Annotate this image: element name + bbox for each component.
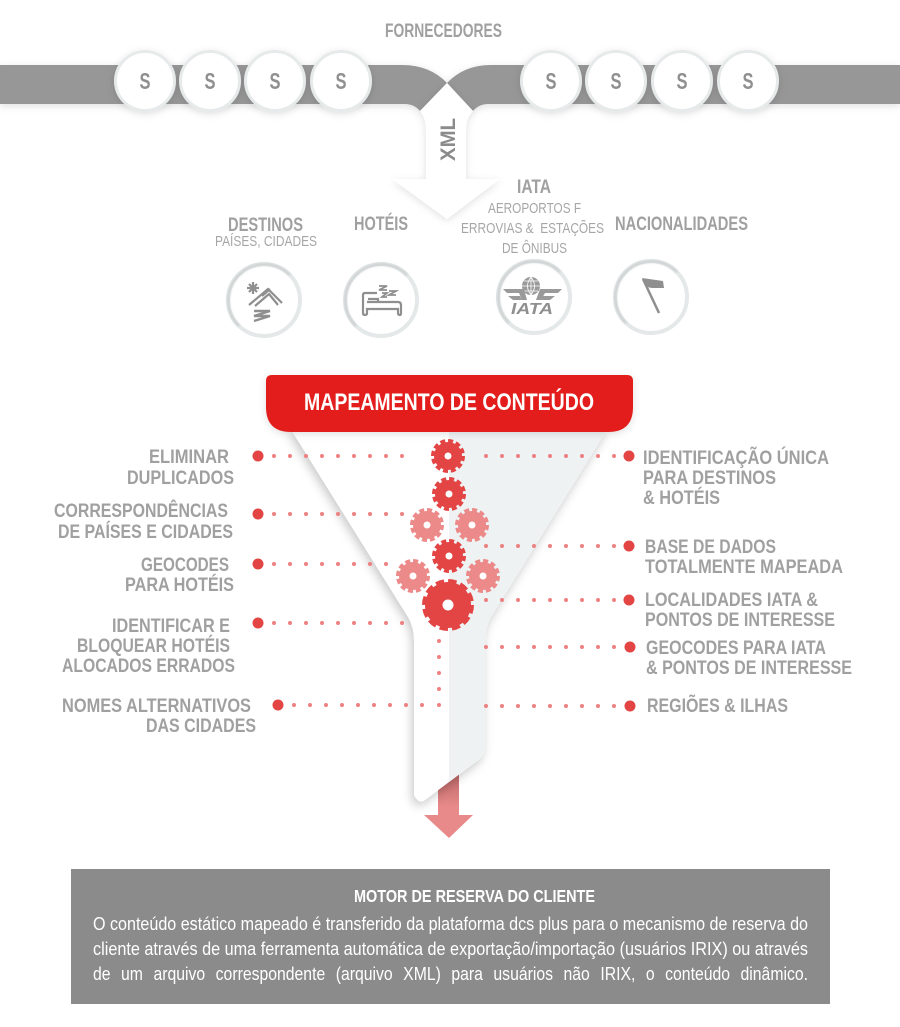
panel body text: de um arquivo correspondente (arquivo XML) para usuários não IRIX, o conteúdo dinâmico.	[93, 964, 808, 984]
category: hoteis: HOTÉIS	[354, 213, 408, 235]
right labels: TOTALMENTE MAPEADA	[645, 557, 843, 578]
category: destinos: DESTINOS	[228, 215, 303, 236]
supplier circles: S	[270, 68, 280, 94]
left labels: GEOCODES	[141, 555, 229, 576]
left labels: ELIMINAR	[149, 447, 229, 468]
category: hoteis	[345, 213, 417, 336]
supplier circles: S	[676, 68, 688, 94]
left labels: PARA HOTÉIS	[125, 574, 234, 596]
right labels: IDENTIFICAÇÃO ÚNICA	[643, 447, 829, 469]
left labels: NOMES ALTERNATIVOS	[62, 696, 251, 717]
left labels: CORRESPONDÊNCIAS	[54, 500, 228, 522]
panel body text: O conteúdo estático mapeado é transferido da plataforma dcs plus para o mecanismo de reserva do	[93, 914, 808, 934]
category: destinos	[215, 215, 317, 336]
left labels: IDENTIFICAR E	[112, 616, 230, 637]
arrow: XML	[392, 83, 500, 219]
supplier circles: S	[546, 68, 556, 94]
panel body text: cliente através de uma ferramenta automática de exportação/importação (usuários IRIX) ou através	[93, 939, 808, 959]
right labels: & PONTOS DE INTERESSE	[646, 658, 852, 679]
left labels: DUPLICADOS	[127, 468, 234, 489]
category: nacionalidades	[615, 214, 748, 333]
right labels: PARA DESTINOS	[643, 468, 776, 489]
icon: flag	[642, 278, 664, 313]
supplier circles: S	[742, 68, 754, 94]
left labels: DAS CIDADES	[146, 716, 256, 737]
left labels: ALOCADOS ERRADOS	[62, 656, 235, 677]
icon: iata logo	[503, 277, 562, 318]
panel heading: MOTOR DE RESERVA DO CLIENTE	[354, 886, 595, 906]
supplier circles	[116, 52, 778, 110]
icon: bed	[363, 286, 401, 315]
icon: sun, mountain and road	[247, 282, 282, 321]
heading: fornecedores: FORNECEDORES	[385, 21, 502, 42]
category: iata: IATA	[517, 177, 551, 198]
category: destinos: PAÍSES, CIDADES	[215, 233, 317, 250]
supplier circles: S	[140, 68, 150, 94]
right labels: REGIÕES & ILHAS	[647, 695, 788, 717]
right labels: & HOTÉIS	[643, 487, 720, 509]
left labels	[54, 447, 256, 737]
right labels: LOCALIDADES IATA &	[645, 590, 818, 611]
supplier circles: S	[204, 68, 216, 94]
panel body text	[93, 914, 808, 984]
supplier pipeline band	[0, 65, 900, 111]
category: iata: DE ÔNIBUS	[502, 240, 567, 257]
right labels	[643, 447, 852, 717]
panel: motor de reserva do cliente	[71, 869, 830, 1004]
icon: iata logo: IATA	[511, 301, 553, 318]
left labels: DE PAÍSES E CIDADES	[58, 521, 233, 543]
supplier circles: S	[610, 68, 622, 94]
right labels: PONTOS DE INTERESSE	[645, 610, 835, 631]
gears	[398, 441, 498, 628]
category: iata: ERROVIAS & ESTAÇÕES	[461, 220, 604, 237]
dotted connectors	[252, 450, 636, 712]
category: iata	[461, 177, 604, 333]
header: mapeamento de conteudo	[266, 375, 633, 432]
right labels: BASE DE DADOS	[645, 537, 776, 558]
supplier circles: S	[336, 68, 346, 94]
header: mapeamento de conteudo: MAPEAMENTO DE CONTEÚDO	[304, 388, 594, 416]
label: XML: XML	[437, 118, 460, 161]
category: iata: AEROPORTOS F	[488, 200, 581, 217]
left labels: BLOQUEAR HOTÉIS	[77, 635, 230, 657]
arrow: output	[424, 770, 473, 838]
funnel	[290, 428, 608, 802]
right labels: GEOCODES PARA IATA	[646, 638, 826, 659]
category: nacionalidades: NACIONALIDADES	[615, 214, 748, 235]
